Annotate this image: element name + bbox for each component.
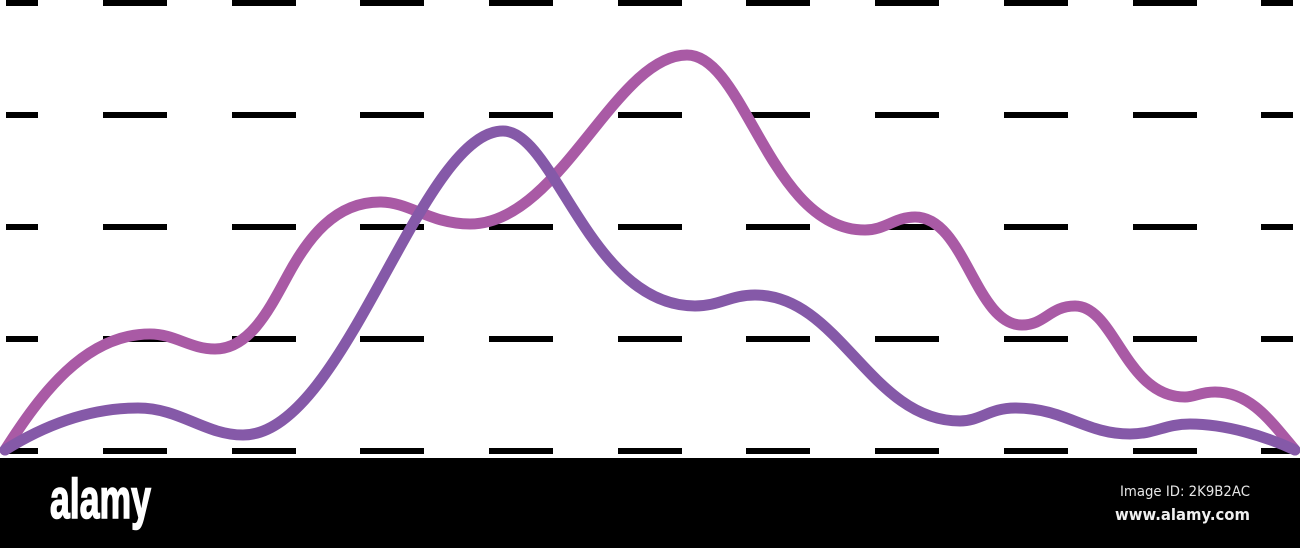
pink curve xyxy=(5,55,1295,450)
website url: www.alamy.com xyxy=(1115,505,1250,524)
image id: Image ID: 2K9B2AC xyxy=(1120,484,1250,500)
purple curve xyxy=(5,131,1295,450)
logo wordmark: alamy xyxy=(50,467,151,530)
footer band xyxy=(0,458,1300,548)
